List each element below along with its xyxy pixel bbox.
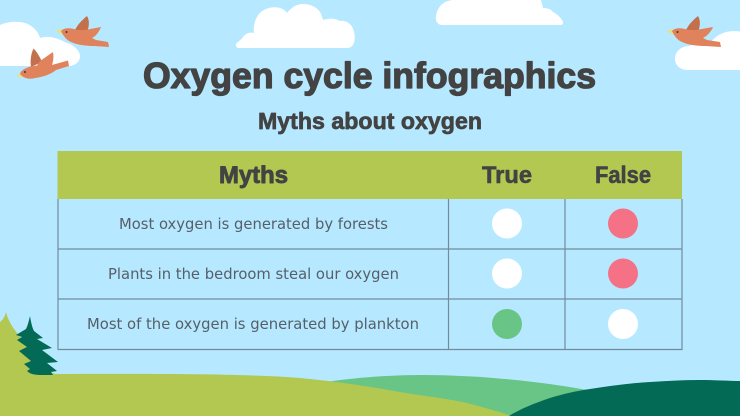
subtitle: Myths about oxygen bbox=[258, 108, 482, 134]
table: myths bbox=[58, 151, 682, 350]
row 3 false: white dot bbox=[608, 309, 638, 339]
icon: bird top left bbox=[56, 16, 109, 47]
header: False: False bbox=[595, 162, 651, 189]
table grid bbox=[58, 199, 682, 350]
row 3 true: green dot bbox=[492, 309, 522, 339]
icon: bird lower left bbox=[16, 48, 69, 79]
row 3 text: Most of the oxygen is generated by plankton bbox=[87, 315, 419, 333]
cloud: left bbox=[0, 22, 80, 66]
hill: olive foreground bbox=[0, 312, 512, 416]
header: Myths: Myths bbox=[219, 162, 288, 189]
cloud: top centre bbox=[236, 4, 355, 48]
row 1 false: red dot bbox=[608, 208, 638, 238]
icon: bird top right bbox=[667, 16, 721, 47]
row 2 text: Plants in the bedroom steal our oxygen bbox=[108, 265, 399, 283]
icon: pine tree bbox=[16, 316, 58, 375]
row 2 true: white dot bbox=[492, 258, 522, 288]
cloud: top right bbox=[436, 0, 563, 25]
cloud: right bbox=[675, 31, 740, 70]
row 2 false: red dot bbox=[608, 258, 638, 288]
table header band bbox=[58, 151, 682, 199]
hill: dark green bbox=[509, 380, 740, 416]
header: True: True bbox=[482, 162, 532, 189]
title: Oxygen cycle infographics bbox=[143, 55, 596, 96]
hill: light green bbox=[320, 375, 592, 416]
row 1 true: white dot bbox=[492, 208, 522, 238]
row 1 text: Most oxygen is generated by forests bbox=[119, 215, 388, 233]
